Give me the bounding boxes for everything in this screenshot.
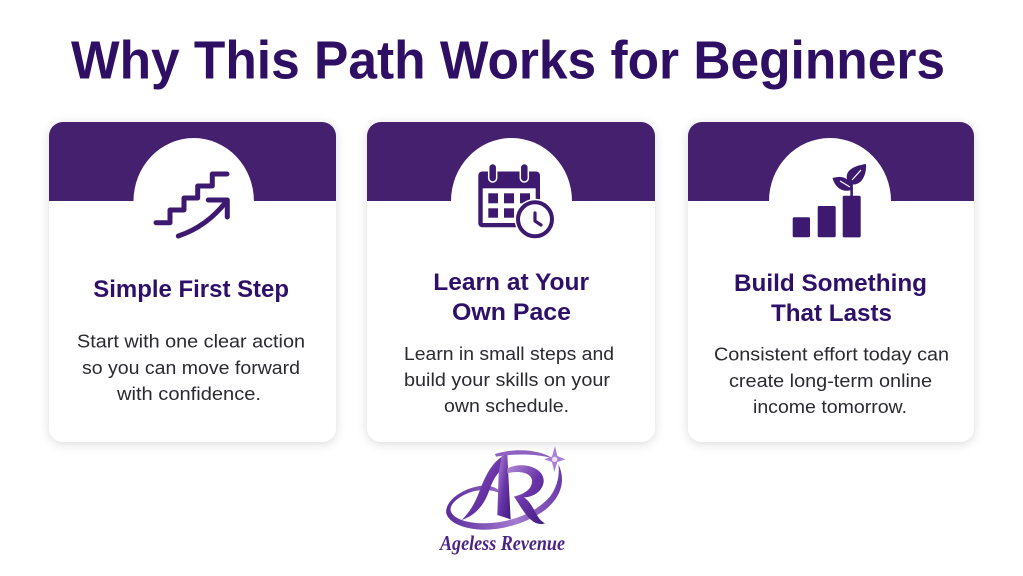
icon: calendar with clock bbox=[478, 164, 556, 240]
body text: income tomorrow. bbox=[753, 397, 907, 417]
panel header band bbox=[49, 122, 336, 201]
heading bbox=[433, 269, 589, 326]
body text: Consistent effort today can bbox=[714, 345, 949, 365]
icon circle bbox=[769, 138, 891, 201]
body text: Learn in small steps and bbox=[404, 344, 614, 364]
body text bbox=[77, 332, 305, 404]
heading: Simple First Step bbox=[93, 276, 289, 303]
logo wordmark: Ageless Revenue bbox=[438, 531, 565, 555]
heading: That Lasts bbox=[771, 300, 892, 327]
icon circle bbox=[451, 138, 572, 201]
heading: Learn at Your bbox=[433, 269, 589, 296]
icon: stairs with arrow bbox=[156, 174, 227, 236]
body text bbox=[404, 344, 614, 416]
body text: so you can move forward bbox=[82, 358, 300, 378]
heading: Own Pace bbox=[452, 299, 571, 326]
panel header band bbox=[367, 122, 655, 201]
title: Why This Path Works for Beginners bbox=[71, 30, 945, 90]
icon: growing bars with plant bbox=[793, 164, 866, 237]
panel header band bbox=[688, 122, 974, 201]
body text: Start with one clear action bbox=[77, 332, 305, 352]
heading: Build Something bbox=[734, 270, 927, 297]
body text: create long-term online bbox=[729, 371, 932, 391]
body text: build your skills on your bbox=[404, 370, 610, 390]
logo: Ageless Revenue bbox=[438, 446, 565, 555]
panel: simple first step bbox=[49, 122, 336, 442]
logo mark bbox=[446, 446, 565, 530]
body text bbox=[714, 345, 949, 417]
panel: learn at your own pace bbox=[367, 122, 655, 442]
heading bbox=[734, 270, 927, 327]
body text: own schedule. bbox=[444, 396, 569, 416]
icon circle bbox=[134, 138, 254, 201]
panel: build something that lasts bbox=[688, 122, 974, 442]
body text: with confidence. bbox=[116, 384, 261, 404]
